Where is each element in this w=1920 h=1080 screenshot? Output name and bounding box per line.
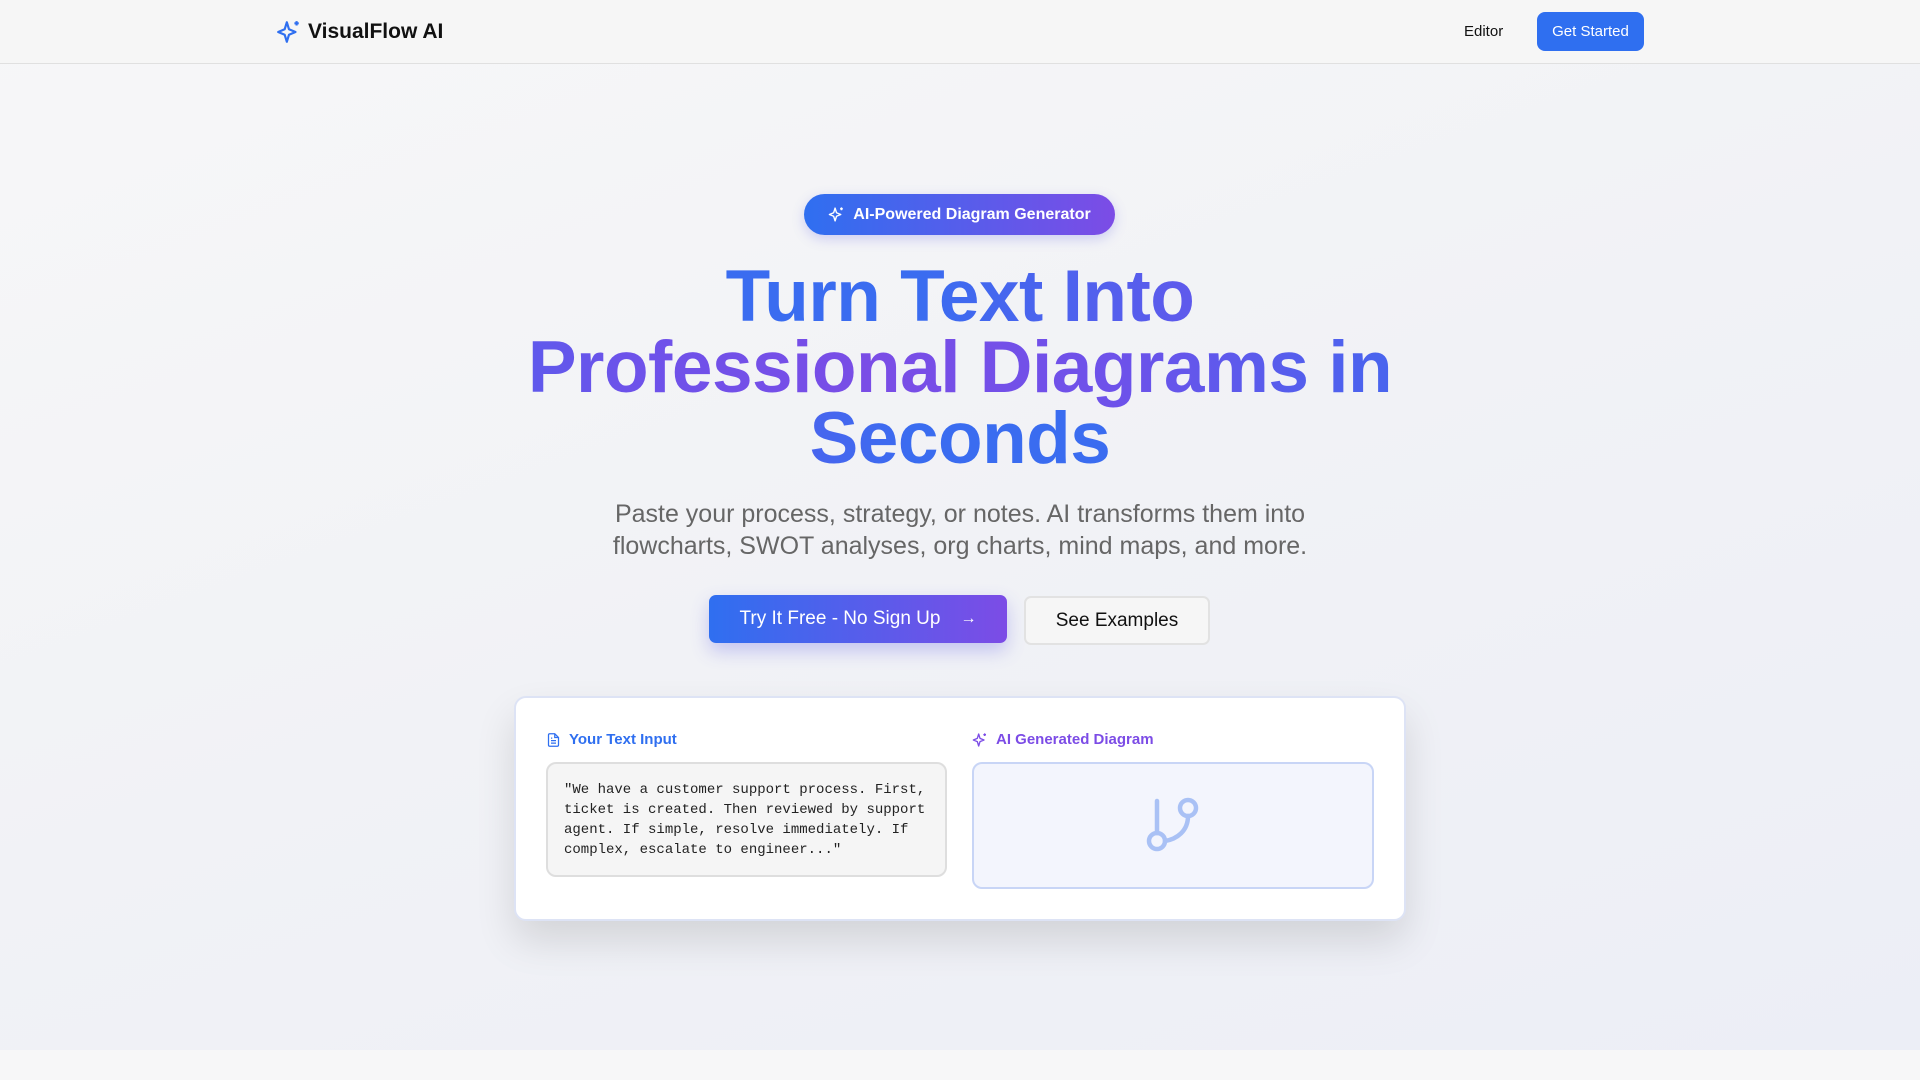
button: See Examples [1024, 596, 1210, 645]
button: Try It Free: Try It Free - No Sign Up [740, 608, 940, 629]
title: Turn Text Into [726, 256, 1194, 337]
button: Try It Free [709, 595, 1007, 643]
title: Professional Diagrams in [528, 327, 1392, 408]
badge [804, 194, 1115, 235]
icon: branch [1146, 798, 1198, 852]
subtitle: Paste your process, strategy, or notes. AI transforms them into [615, 500, 1305, 528]
badge: AI-Powered Diagram Generator [853, 206, 1091, 222]
label: Your Text Input: Your Text Input [569, 731, 677, 748]
button: Try It Free: → [960, 610, 976, 627]
nav link: Editor: Editor [1464, 23, 1503, 40]
button: Get Started: Get Started [1552, 23, 1629, 40]
nav bar [0, 0, 1920, 64]
text input box [546, 762, 947, 877]
button: Get Started [1537, 12, 1644, 51]
diagram preview box [972, 762, 1374, 889]
subtitle [613, 500, 1307, 560]
title [528, 256, 1392, 479]
demo card [514, 696, 1406, 921]
icon: sparkle [277, 21, 299, 43]
button: See Examples: See Examples [1056, 610, 1178, 630]
subtitle: flowcharts, SWOT analyses, org charts, mind maps, and more. [613, 532, 1307, 560]
icon: badge sparkle [828, 207, 843, 222]
text input box: "We have a customer support process. First, ticket is created. Then reviewed by support agent. If simple, resolve immediately. If complex, escalate to engineer..." [564, 782, 925, 858]
logo: VisualFlow AI [308, 20, 443, 43]
label: AI Generated Diagram: AI Generated Diagram [996, 731, 1154, 748]
bottom band [0, 1050, 1920, 1080]
title: Seconds [810, 398, 1110, 479]
